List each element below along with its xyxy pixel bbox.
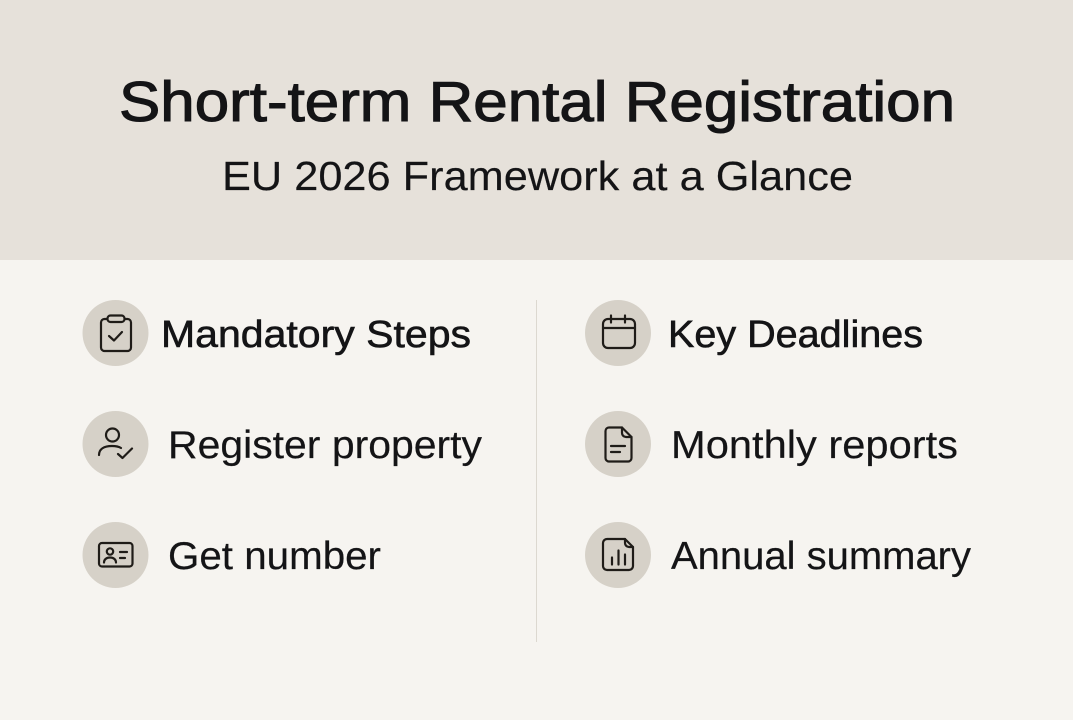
item: get number: Get number xyxy=(168,535,381,578)
item: annual summary: Annual summary xyxy=(671,535,972,578)
subtitle: EU 2026 Framework at a Glance xyxy=(222,153,853,199)
icon: calendar xyxy=(585,300,651,366)
title: Short-term Rental Registration xyxy=(119,70,955,134)
icon: id card xyxy=(82,522,148,588)
icon: document xyxy=(585,411,651,477)
icon: chart document xyxy=(585,522,651,588)
item: register property: Register property xyxy=(168,424,483,467)
column divider xyxy=(536,300,537,642)
header band xyxy=(0,0,1073,260)
icon: person check xyxy=(82,411,148,477)
panel: key deadlines xyxy=(585,300,972,588)
icon: clipboard check xyxy=(82,300,148,366)
panel: mandatory steps xyxy=(82,300,483,588)
heading: key deadlines: Key Deadlines xyxy=(668,314,923,356)
item: monthly reports: Monthly reports xyxy=(671,424,958,467)
heading: mandatory steps: Mandatory Steps xyxy=(161,314,471,356)
